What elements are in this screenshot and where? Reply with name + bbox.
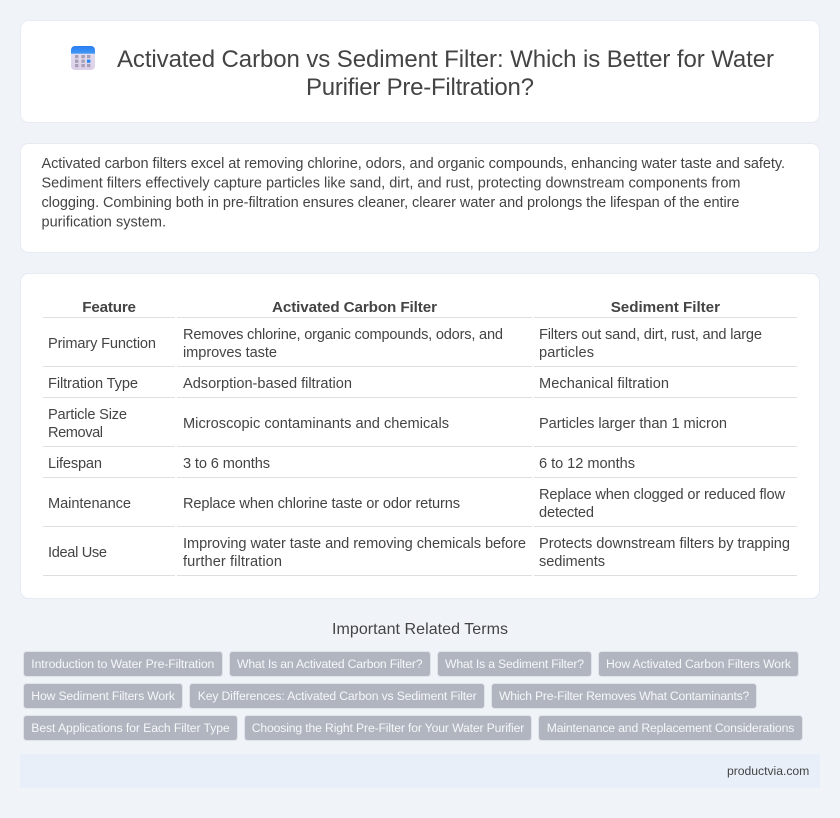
chip: Best Applications for Each Filter Type (31, 721, 230, 735)
row: primary function: particles (539, 345, 594, 361)
row: ideal use (43, 536, 797, 576)
chip: Key Differences: Activated Carbon vs Sediment Filter (198, 689, 477, 703)
row: primary function: improves taste (183, 345, 277, 361)
text block: summary: clogging. Combining both in pre-filtration ensures cleaner, clearer water and prolongs the lifespan of the entire (42, 195, 740, 211)
chip (190, 684, 484, 708)
panel: comparison table (20, 274, 820, 598)
chip (24, 684, 182, 708)
panel: title header (20, 20, 820, 122)
row: maintenance: detected (539, 505, 594, 521)
chip (438, 652, 592, 676)
row: ideal use: Ideal Use (48, 545, 107, 561)
title (117, 46, 774, 101)
chip: Choosing the Right Pre-Filter for Your Water Purifier (252, 721, 524, 735)
row: filtration type: Filtration Type (48, 376, 138, 392)
text block: summary: Activated carbon filters excel at removing chlorine, odors, and organic compounds, enhancing water taste and safety. (42, 156, 785, 172)
table header: Feature (82, 299, 136, 316)
chip: What Is a Sediment Filter? (445, 657, 584, 671)
row: particle size removal: Removal (48, 425, 103, 441)
row: primary function: Filters out sand, dirt, rust, and large (539, 327, 762, 343)
row: ideal use: Improving water taste and removing chemicals before (183, 536, 526, 552)
chip (244, 716, 532, 740)
row: filtration type (43, 376, 797, 398)
row: particle size removal: Microscopic contaminants and chemicals (183, 416, 449, 432)
row: primary function: Removes chlorine, organic compounds, odors, and (183, 327, 503, 343)
icon: calendar grid (71, 46, 95, 70)
heading: important related terms: Important Related Terms (332, 621, 508, 638)
row: lifespan (43, 456, 797, 478)
row: particle size removal: Particle Size (48, 407, 127, 423)
chip (230, 652, 430, 676)
row: primary function (43, 327, 797, 366)
chip (24, 652, 222, 676)
chip (598, 652, 798, 676)
text block: summary: Sediment filters effectively capture particles like sand, dirt, and rust, protecting downstream components from (42, 176, 740, 192)
chip: Introduction to Water Pre-Filtration (31, 657, 214, 671)
row: maintenance (43, 487, 797, 526)
row: particle size removal (43, 407, 797, 446)
row: lifespan: 3 to 6 months (183, 456, 270, 472)
text block: summary: purification system. (42, 214, 166, 230)
row: ideal use: Protects downstream filters by trapping (539, 536, 790, 552)
chip (538, 716, 802, 740)
chip: What Is an Activated Carbon Filter? (237, 657, 423, 671)
row: ideal use: sediments (539, 554, 605, 570)
chip: How Activated Carbon Filters Work (606, 657, 792, 671)
table header (43, 299, 797, 318)
row: lifespan: Lifespan (48, 456, 102, 472)
row: lifespan: 6 to 12 months (539, 456, 635, 472)
footer: productvia.com (727, 764, 809, 778)
title: Activated Carbon vs Sediment Filter: Which is Better for Water (117, 46, 774, 73)
text block: summary (42, 156, 785, 230)
chip: Maintenance and Replacement Considerations (547, 721, 794, 735)
table header: Sediment Filter (611, 299, 720, 316)
title: Purifier Pre-Filtration? (306, 74, 534, 101)
chip: How Sediment Filters Work (31, 689, 176, 703)
row: particle size removal: Particles larger than 1 micron (539, 416, 727, 432)
row: filtration type: Mechanical filtration (539, 376, 669, 392)
panel: related term chips (24, 652, 802, 740)
row: primary function: Primary Function (48, 336, 156, 352)
row: ideal use: further filtration (183, 554, 282, 570)
row: maintenance: Replace when chlorine taste or odor returns (183, 496, 460, 512)
footer (20, 754, 820, 788)
table header: Activated Carbon Filter (272, 299, 437, 316)
row: maintenance: Maintenance (48, 496, 131, 512)
chip (24, 716, 238, 740)
chip (492, 684, 756, 708)
panel: intro text (20, 144, 820, 252)
row: filtration type: Adsorption-based filtration (183, 376, 352, 392)
row: maintenance: Replace when clogged or reduced flow (539, 487, 785, 503)
chip: Which Pre-Filter Removes What Contaminants? (499, 689, 750, 703)
